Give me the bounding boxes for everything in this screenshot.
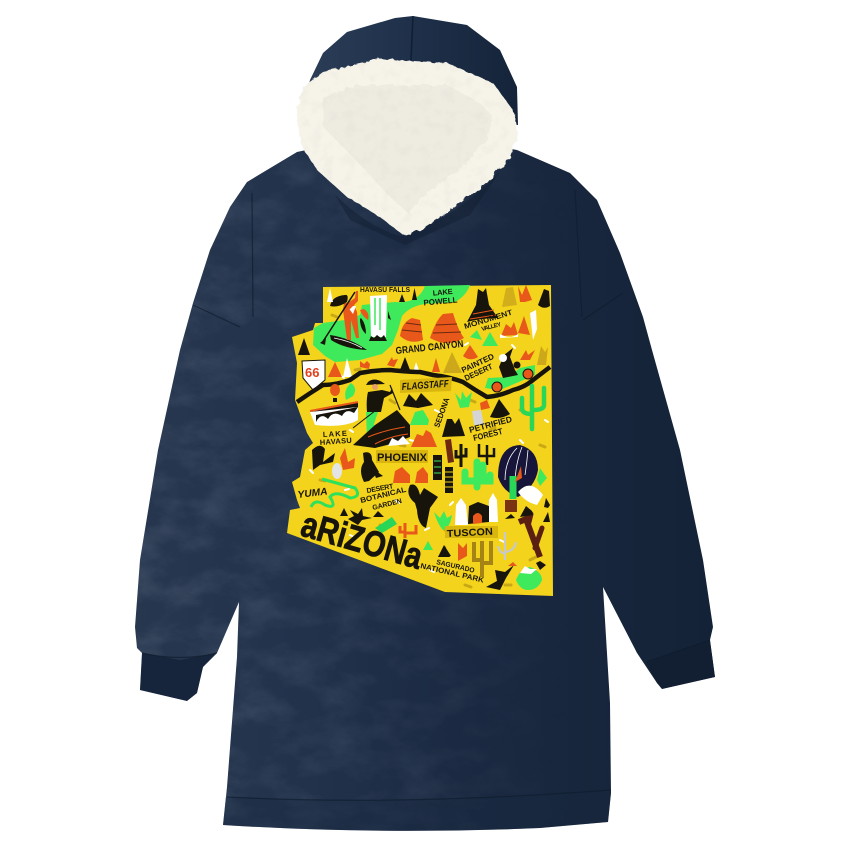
hoodie body and sleeves (130, 140, 720, 840)
neck shadow (335, 172, 500, 245)
label: Monument Valley: VALLEY (481, 322, 502, 333)
label: Phoenix: PHOENIX (377, 452, 428, 464)
label: Havasu Falls: HAVASU FALLS (360, 285, 410, 294)
icon: route 66 sign: 66 (305, 365, 319, 380)
scattered map texture (310, 307, 548, 572)
icon: grand canyon rocks (400, 313, 464, 343)
place labels (297, 285, 514, 585)
hood shell (309, 16, 518, 125)
label backgrounds (376, 377, 498, 538)
label: Lake Havasu: HAVASU (320, 436, 352, 447)
label: Desert Botanical Garden: BOTANICAL (359, 485, 408, 505)
label: Saguaro National Park: SAGURADO (436, 559, 476, 575)
label: Grand Canyon: GRAND CANYON (395, 339, 464, 357)
label: Monument Valley: MONUMENT (463, 308, 514, 331)
label: Lake Havasu: LAKE (323, 429, 347, 439)
label: Painted Desert: PAINTED (460, 352, 496, 375)
label: Desert Botanical Garden: DESERT (366, 483, 395, 495)
icon: waterfall (369, 295, 387, 341)
dark yellow speckles (320, 315, 545, 587)
icon: route 66 sign (302, 360, 325, 390)
label: Yuma: YUMA (297, 486, 328, 501)
heading: Arizona: aRiZONa (297, 503, 428, 577)
icon: paddleboarder (320, 291, 367, 350)
icon: prickly pear and snake west (311, 446, 383, 507)
sherpa hood lining (295, 55, 520, 237)
icon: northwest plants and trees (298, 288, 462, 377)
icon: red rock formations (393, 430, 437, 483)
icon: central cacti and buildings (340, 439, 494, 557)
label: Petrified Forest: PETRIFIED (468, 414, 513, 435)
icon: bridge (310, 401, 358, 426)
label: Painted Desert: DESERT (463, 362, 494, 383)
label: Desert Botanical Garden: GARDEN (372, 498, 403, 512)
label: Tuscon: TUSCON (447, 527, 493, 540)
icon: mission church (455, 493, 498, 525)
label: Lake Powell: POWELL (423, 296, 458, 307)
hoodie garment (130, 10, 720, 840)
route 66 road (297, 367, 550, 402)
icon: monument valley buttes (463, 285, 550, 365)
label: Lake Powell: LAKE (432, 287, 453, 298)
icon: saguaro and desert plants east (403, 386, 544, 437)
icon: southern saguaros (438, 498, 550, 590)
label: Saguaro National Park: NATIONAL PARK (420, 561, 486, 585)
label: Flagstaff: FLAGSTAFF (401, 379, 450, 393)
map outline (287, 285, 553, 596)
green river and lake (313, 285, 470, 362)
icon: car with driver (485, 348, 535, 392)
label: Desert Botanical Garden (359, 483, 408, 512)
label: Sedona: SEDONA (432, 396, 452, 429)
icon: hot air balloon and leaf (330, 383, 355, 402)
icon: mountain (353, 410, 410, 448)
panel: Arizona map (287, 285, 553, 596)
label: Petrified Forest: FOREST (472, 426, 504, 443)
label: Lake Havasu (320, 429, 352, 447)
icon: hiker (353, 380, 400, 438)
icon: barrel balloon with basket (498, 445, 547, 512)
label: Lake Powell (422, 287, 458, 307)
